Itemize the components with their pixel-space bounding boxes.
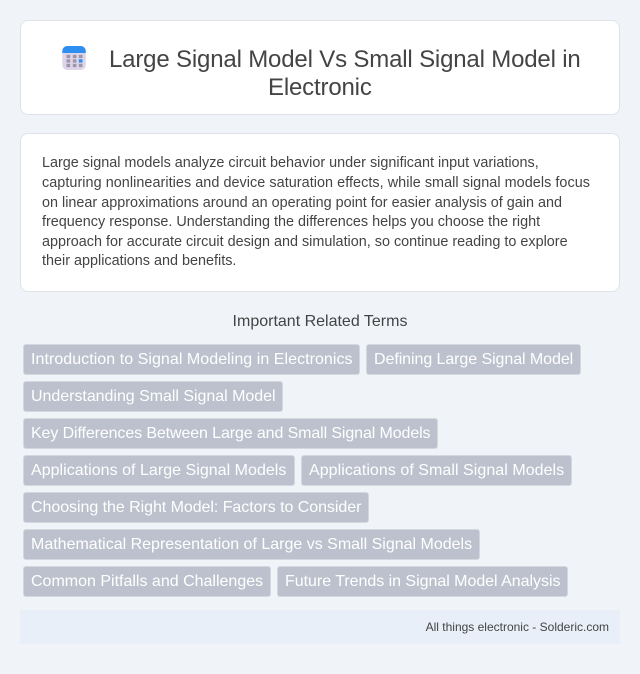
tag	[23, 529, 480, 560]
tag	[366, 344, 581, 375]
footer	[20, 610, 620, 644]
tag: Applications of Large Signal Models	[31, 462, 286, 479]
panel: related terms tags	[23, 344, 581, 597]
tag: Understanding Small Signal Model	[31, 388, 276, 405]
footer credit: All things electronic - Solderic.com	[426, 620, 609, 634]
text: introduction paragraph: approach for accurate circuit design and simulation, so continue reading to explore	[42, 234, 568, 250]
tag	[23, 381, 283, 412]
text: introduction paragraph: their applications and benefits.	[42, 253, 236, 269]
title	[109, 46, 581, 101]
text: introduction paragraph: frequency response. Understanding the differences helps you choose the right	[42, 214, 540, 230]
tag	[23, 455, 295, 486]
tag: Introduction to Signal Modeling in Electronics	[31, 351, 353, 368]
tag	[301, 455, 572, 486]
tag: Defining Large Signal Model	[374, 351, 573, 368]
text: introduction paragraph: Large signal models analyze circuit behavior under significant input variations,	[42, 155, 539, 171]
tag	[23, 566, 271, 597]
tag: Choosing the Right Model: Factors to Consider	[31, 499, 361, 516]
tag	[23, 344, 360, 375]
icon: calendar	[62, 46, 86, 70]
text: introduction paragraph: on linear approximations around an operating point for easier analysis of gain and	[42, 195, 562, 211]
tag: Common Pitfalls and Challenges	[31, 573, 263, 590]
heading: important related terms: Important Related Terms	[233, 313, 407, 330]
panel: introduction	[20, 133, 620, 292]
panel: title card	[20, 20, 620, 115]
text: introduction paragraph: capturing nonlinearities and device saturation effects, while small signal models focus	[42, 175, 590, 191]
tag: Future Trends in Signal Model Analysis	[285, 573, 560, 590]
tag	[277, 566, 568, 597]
tag	[23, 418, 438, 449]
title: Electronic	[268, 74, 372, 101]
title: Large Signal Model Vs Small Signal Model in	[109, 46, 581, 73]
tag: Key Differences Between Large and Small Signal Models	[31, 425, 430, 442]
tag: Applications of Small Signal Models	[309, 462, 564, 479]
text: introduction paragraph	[42, 155, 590, 269]
tag: Mathematical Representation of Large vs Small Signal Models	[31, 536, 472, 553]
tag	[23, 492, 369, 523]
